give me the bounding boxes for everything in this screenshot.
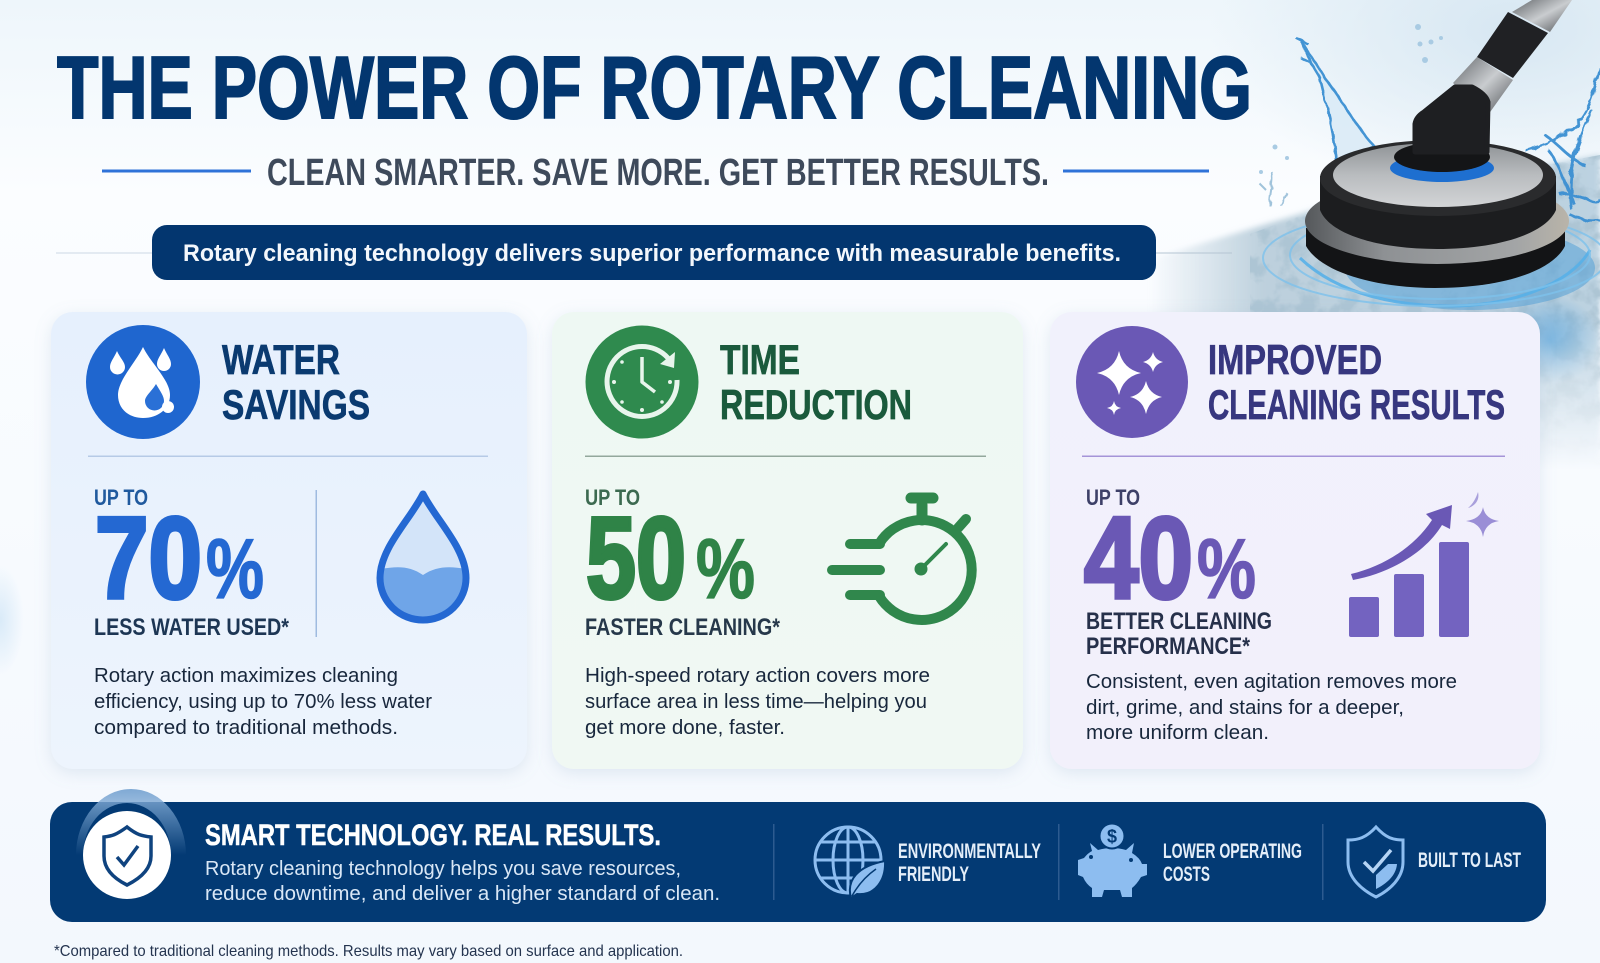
heading (1208, 336, 1505, 428)
icon: half-filled water drop (380, 494, 466, 620)
stat: up to 40%: UP TO (1086, 485, 1140, 510)
stat: up to 70%: UP TO (94, 485, 148, 510)
cleaner black elbow (1415, 87, 1488, 152)
banner description: Rotary cleaning technology helps you save resources, (205, 857, 681, 880)
heading: IMPROVED (1208, 336, 1382, 383)
description: more uniform clean. (1086, 721, 1269, 744)
heading: TIME (720, 336, 800, 383)
eco label (898, 839, 1041, 886)
cleaner lower tube (1453, 57, 1513, 115)
costs label (1163, 839, 1302, 886)
footnote: *Compared to traditional cleaning methods. Results may vary based on surface and application. (54, 943, 683, 960)
stat: up to 70%: 70 (95, 493, 202, 623)
cleaner silver skirt (1305, 178, 1569, 264)
stat: up to 50%: % (696, 522, 755, 616)
stat: up to 70% (94, 485, 290, 641)
cleaner black body (1320, 176, 1556, 249)
costs label: COSTS (1163, 862, 1210, 886)
arc behind shield (76, 789, 186, 855)
heading: SAVINGS (222, 381, 370, 428)
banner: smart technology (50, 789, 1546, 922)
heading (720, 336, 912, 428)
banner background (50, 802, 1546, 922)
description: Rotary action maximizes cleaning (94, 664, 398, 687)
description: surface area in less time—helping you (585, 690, 927, 713)
wet floor surface (1165, 153, 1600, 454)
icon: clock (586, 326, 698, 438)
cleaner black collar (1477, 12, 1548, 78)
cleaner black rim (1320, 140, 1556, 216)
panel: water savings (51, 312, 527, 769)
costs label: LOWER OPERATING (1163, 839, 1302, 863)
water splash left (1258, 38, 1374, 206)
stat: up to 70%: % (206, 522, 264, 616)
panel: time reduction (552, 312, 1023, 769)
cleaner blue ring (1390, 154, 1494, 182)
icon: shield check (1348, 827, 1403, 897)
icon: globe with leaf (815, 827, 885, 898)
illustration: rotary cleaner with water splash (1165, 0, 1600, 454)
stat: up to 70%: LESS WATER USED* (94, 614, 290, 641)
left edge water blur (0, 565, 24, 675)
stat: up to 50%: FASTER CLEANING* (585, 614, 781, 641)
cleaner brush (1306, 228, 1565, 288)
banner heading: SMART TECHNOLOGY. REAL RESULTS. (205, 819, 661, 852)
description: efficiency, using up to 70% less water (94, 690, 432, 713)
description: Consistent, even agitation removes more (1086, 670, 1457, 693)
description: High-speed rotary action covers more (585, 664, 930, 687)
icon: rising bar chart with arrow (1349, 492, 1499, 637)
stat: up to 50%: 50 (586, 493, 686, 623)
description (1086, 670, 1457, 744)
card background (1050, 312, 1540, 769)
panel: improved cleaning results (1050, 312, 1540, 769)
card background (552, 312, 1023, 769)
sky tint behind cleaner (1210, 0, 1600, 200)
water ripples (1263, 210, 1600, 306)
description: dirt, grime, and stains for a deeper, (1086, 696, 1404, 719)
card background (51, 312, 527, 769)
icon: shield with check (83, 811, 171, 899)
title: THE POWER OF ROTARY CLEANING (57, 38, 1252, 137)
icon: piggy bank with coin: $ (1107, 826, 1117, 846)
water pool (1300, 226, 1595, 310)
cleaner pole tube (1512, 0, 1572, 32)
stat: up to 40%: 40 (1084, 493, 1193, 623)
banner description: reduce downtime, and deliver a higher standard of clean. (205, 882, 720, 905)
water splash right (1525, 68, 1600, 221)
heading: WATER (222, 336, 340, 383)
description: compared to traditional methods. (94, 716, 398, 739)
durability label: BUILT TO LAST (1418, 848, 1521, 872)
icon: stopwatch with speed lines (832, 498, 972, 620)
intro banner (56, 225, 1232, 280)
stat: up to 50% (585, 485, 781, 641)
icon: sparkles (1076, 326, 1188, 438)
stat: up to 40% (1084, 485, 1272, 660)
cleaner top silver disc (1333, 143, 1543, 207)
description (94, 664, 432, 739)
description: get more done, faster. (585, 716, 785, 739)
cleaner neck base (1394, 142, 1490, 172)
icon: water drops (86, 325, 200, 439)
description (585, 664, 930, 739)
stat: up to 40%: PERFORMANCE* (1086, 633, 1251, 660)
stat: up to 50%: UP TO (585, 485, 640, 510)
stat: up to 40%: BETTER CLEANING (1086, 608, 1272, 635)
water droplets (1259, 24, 1443, 174)
eco label: FRIENDLY (898, 862, 969, 886)
icon: piggy bank with coin (1078, 824, 1147, 897)
subtitle with side rules: CLEAN SMARTER. SAVE MORE. GET BETTER RESULTS. (267, 152, 1049, 194)
banner description (205, 857, 720, 905)
intro banner: Rotary cleaning technology delivers superior performance with measurable benefits. (183, 240, 1121, 267)
heading: REDUCTION (720, 381, 912, 428)
stat: up to 40%: % (1197, 522, 1256, 616)
heading (222, 336, 370, 428)
eco label: ENVIRONMENTALLY (898, 839, 1041, 863)
